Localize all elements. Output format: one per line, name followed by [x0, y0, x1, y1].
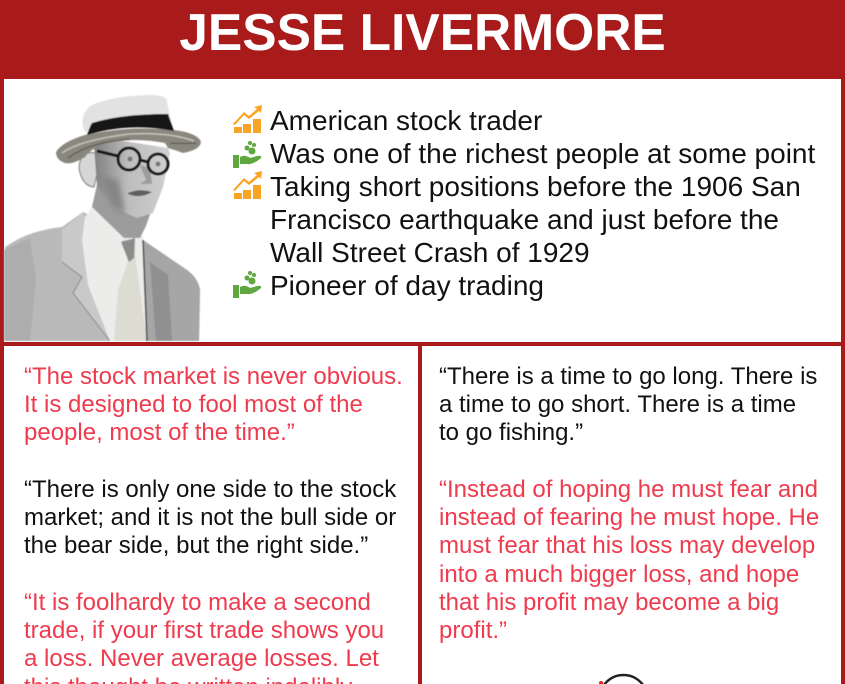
quote: average losses: “It is foolhardy to make a second	[24, 589, 371, 616]
face	[94, 140, 170, 218]
quote: never obvious: people, most of the time.”	[24, 419, 295, 446]
quote: right side: the bear side, but the right side.”	[24, 532, 368, 559]
icon: chart with coins	[233, 105, 262, 133]
quote: right side: market; and it is not the bull side or	[24, 504, 396, 531]
band	[87, 114, 174, 135]
brim	[56, 128, 201, 163]
fact list: Francisco earthquake and just before the	[270, 204, 779, 235]
quote: right side	[24, 476, 396, 559]
tie	[114, 240, 147, 341]
quote: average losses: a loss. Never average losses. Let	[24, 645, 379, 672]
quote: average losses	[24, 589, 384, 684]
icon: hand with money	[233, 141, 262, 168]
quote: fear and hope: into a much bigger loss, and hope	[439, 561, 799, 588]
quote: right side: “There is only one side to the stock	[24, 476, 396, 503]
fact list	[270, 105, 816, 301]
left border	[0, 79, 4, 684]
icon: cropped circle at bottom	[599, 674, 644, 684]
quote: fear and hope: profit.”	[439, 617, 507, 644]
quote: fear and hope: that his profit may become a big	[439, 589, 779, 616]
fact list: Was one of the richest people at some point	[270, 138, 815, 169]
fact list: Wall Street Crash of 1929	[270, 237, 590, 268]
shirt	[82, 207, 147, 341]
icon: chart with coins	[233, 171, 262, 199]
portrait of Jesse Livermore	[3, 94, 202, 342]
jacket	[4, 212, 200, 341]
header banner	[0, 0, 845, 79]
quote: go fishing: a time to go short. There is a time	[439, 391, 796, 418]
quote: never obvious	[24, 363, 403, 446]
fact list: Taking short positions before the 1906 San	[270, 171, 801, 202]
quote: fear and hope: must fear that his loss may develop	[439, 532, 815, 559]
quote: never obvious: “The stock market is never obvious.	[24, 363, 403, 390]
fact list: American stock trader	[270, 105, 542, 136]
ear	[79, 153, 98, 187]
quote: go fishing: “There is a time to go long. There is	[439, 363, 817, 390]
fact list: Pioneer of day trading	[270, 270, 544, 301]
quote: never obvious: It is designed to fool most of the	[24, 391, 363, 418]
quote: fear and hope	[439, 476, 819, 644]
quote: fear and hope: instead of fearing he must hope. He	[439, 504, 819, 531]
neck	[92, 180, 155, 238]
lapel	[62, 212, 112, 341]
panel divider vertical	[418, 342, 422, 684]
crown	[82, 95, 173, 132]
icon: hand with money	[233, 271, 262, 298]
right border	[841, 79, 845, 684]
quote: go fishing	[439, 363, 817, 446]
title: JESSE LIVERMORE	[179, 3, 666, 61]
panel divider horizontal	[0, 342, 845, 346]
quote: fear and hope: “Instead of hoping he must fear and	[439, 476, 818, 503]
quote: average losses: trade, if your first trade shows you	[24, 617, 384, 644]
quote: go fishing: to go fishing.”	[439, 419, 583, 446]
glasses	[97, 148, 168, 174]
